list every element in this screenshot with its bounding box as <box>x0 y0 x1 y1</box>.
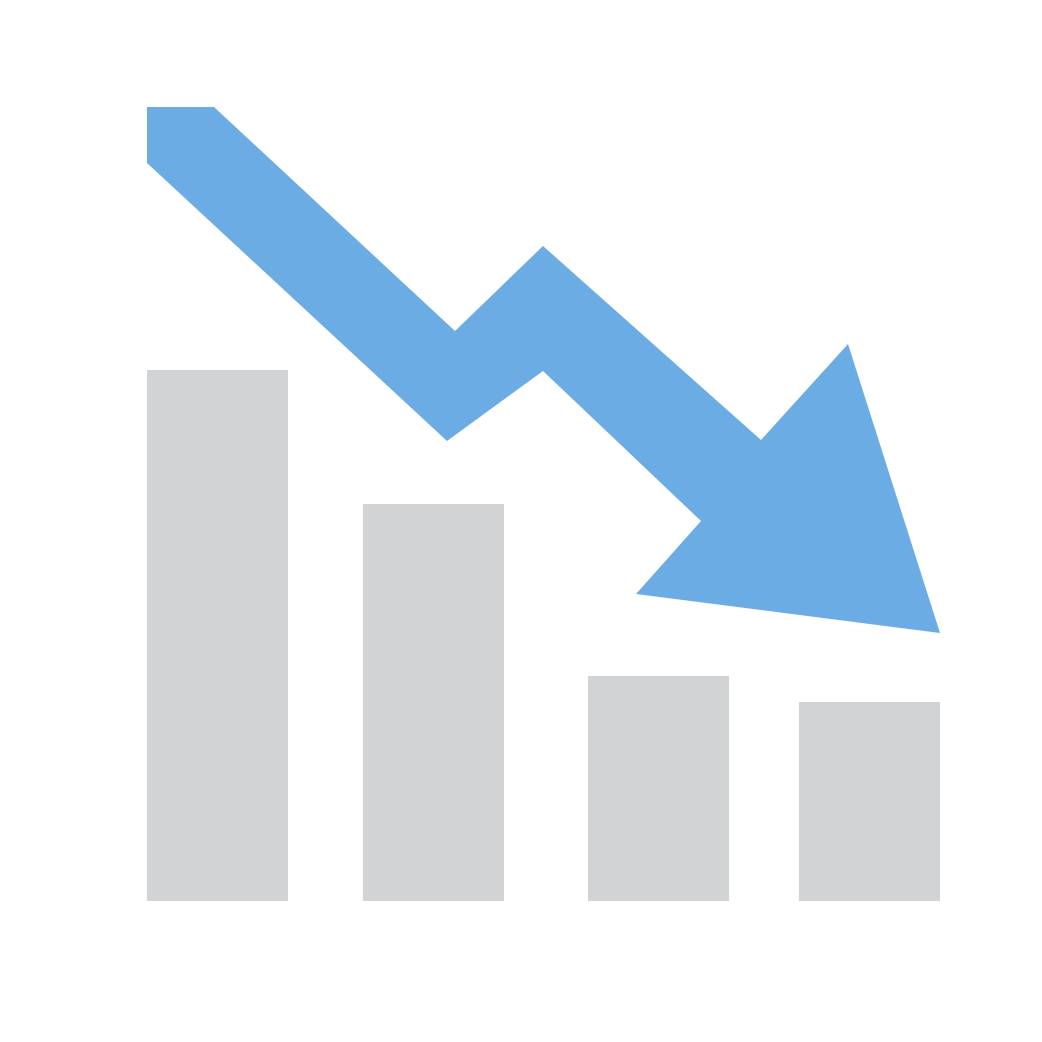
bar 4 <box>799 702 940 901</box>
bar 1 <box>147 370 288 901</box>
bar 3 <box>588 676 729 901</box>
bar chart: four grey bars <box>147 370 940 901</box>
arrow: downward trend <box>147 107 940 633</box>
bar 2 <box>363 504 504 901</box>
